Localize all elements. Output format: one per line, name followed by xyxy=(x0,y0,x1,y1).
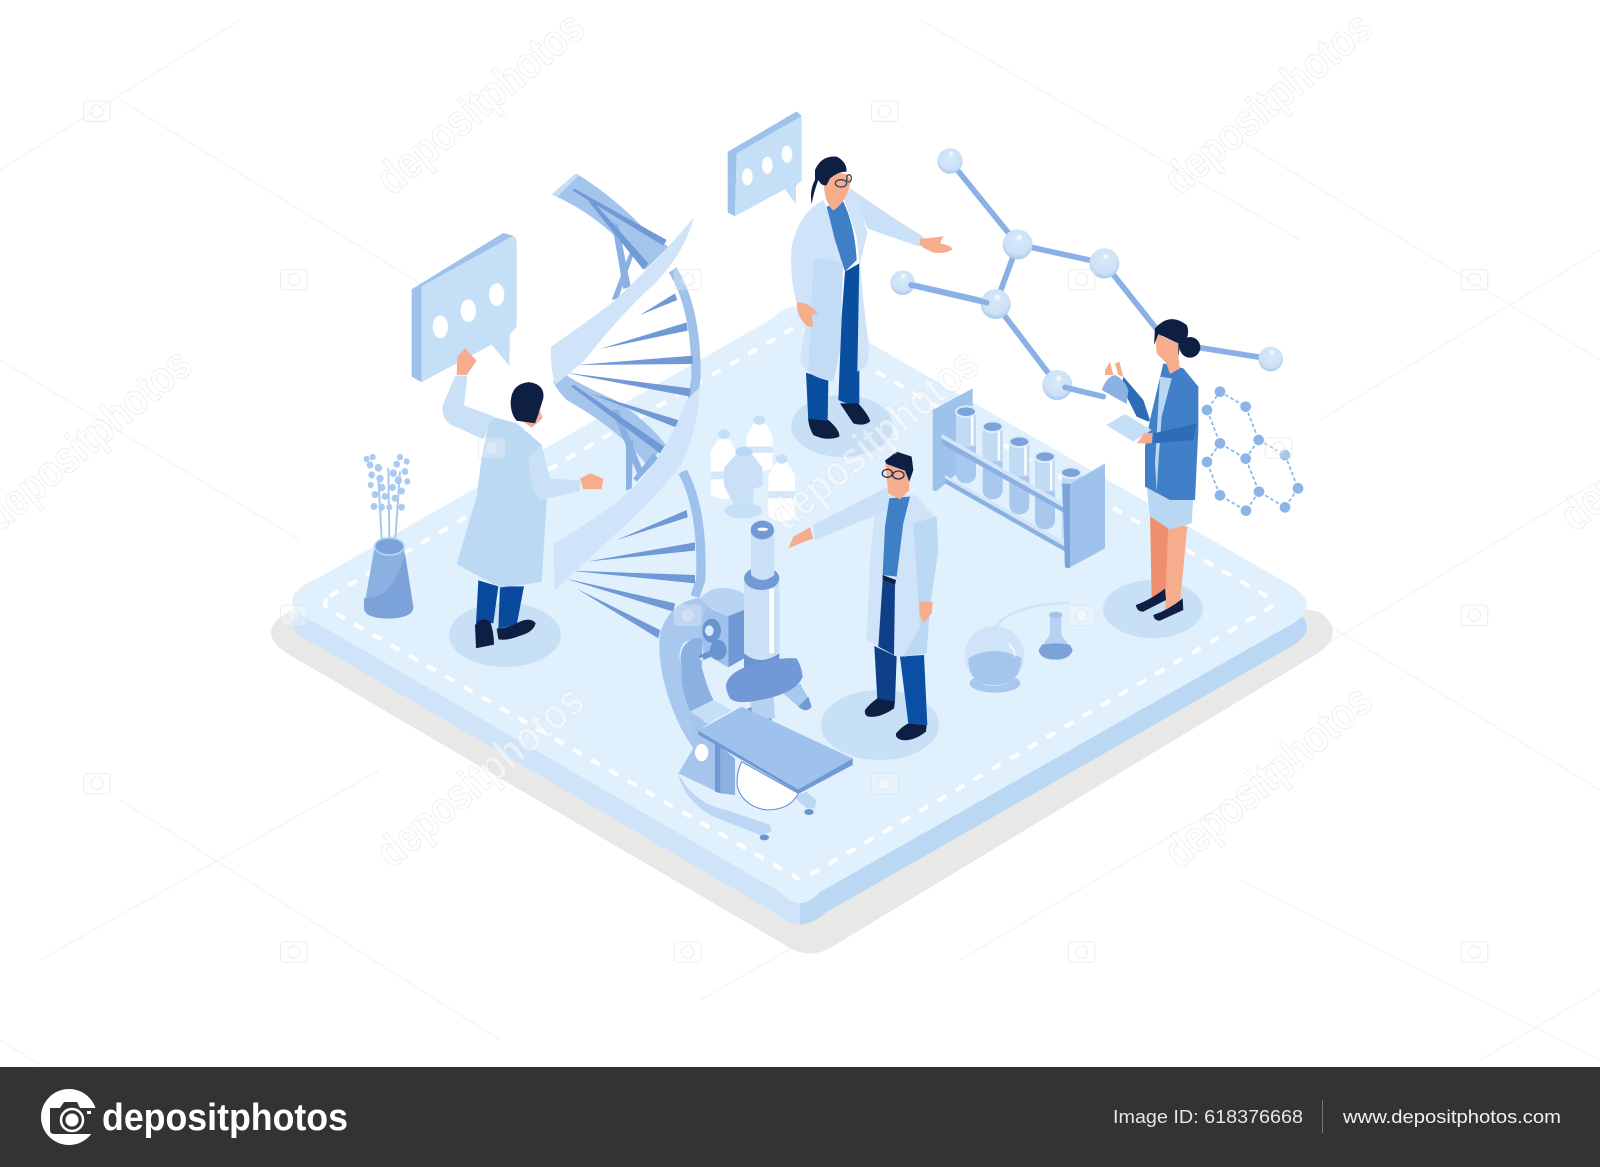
round flask apparatus xyxy=(964,603,1073,693)
DNA double helix: lower turn xyxy=(553,373,701,638)
divider xyxy=(1322,1100,1323,1133)
body tube xyxy=(744,577,779,663)
belt xyxy=(883,575,896,585)
image id: Image ID: 618376668 xyxy=(1113,1106,1303,1127)
DNA front ribbon upper xyxy=(551,217,694,385)
small conical flask xyxy=(1039,612,1073,660)
mirror xyxy=(737,762,798,810)
platform side left face xyxy=(292,328,1307,924)
shirt xyxy=(827,202,857,272)
tube highlight xyxy=(769,588,774,653)
coat panel shade xyxy=(808,259,843,382)
rack upper shelf edge xyxy=(942,438,1065,513)
rack back panel xyxy=(933,388,973,492)
rear leg xyxy=(806,373,828,422)
pointing hand xyxy=(788,527,813,548)
microscope xyxy=(659,521,853,840)
speech bubble: top xyxy=(728,111,802,216)
logo wordmark: depositphotos xyxy=(102,1097,348,1139)
stage xyxy=(698,707,853,789)
trousers xyxy=(476,580,524,629)
plant in vase xyxy=(364,454,413,619)
dark rungs xyxy=(563,189,693,397)
tubes xyxy=(956,406,1082,540)
left leg xyxy=(874,646,897,702)
watermark overlays: depositphotos xyxy=(366,674,594,877)
back ribbon upper xyxy=(552,173,668,270)
platform xyxy=(292,306,1307,924)
lowered hand xyxy=(797,302,818,327)
lab coat left xyxy=(791,200,843,382)
rack lower shelf xyxy=(945,475,1065,547)
dashed border xyxy=(325,328,1273,879)
flask tube xyxy=(995,603,1070,628)
head dark face xyxy=(728,610,744,667)
neck xyxy=(1165,357,1180,374)
back leg xyxy=(1150,513,1168,600)
lowered hand xyxy=(919,602,933,623)
shoes xyxy=(808,403,870,439)
lab coat right xyxy=(843,190,869,372)
test tube rack xyxy=(933,388,1105,568)
raised sleeve xyxy=(1122,377,1150,422)
hand on tablet xyxy=(1137,433,1153,443)
microscope arm xyxy=(659,598,717,748)
rack end panel xyxy=(1062,463,1105,568)
front bottle xyxy=(768,454,795,521)
scientist: left, seen from behind xyxy=(442,348,603,648)
foot right xyxy=(793,792,816,808)
eyepiece lens xyxy=(757,528,768,531)
speech bubble: left xyxy=(412,233,517,382)
bottles base shadow xyxy=(725,503,762,519)
stage edge xyxy=(698,731,853,793)
back strand arc xyxy=(683,472,701,597)
face xyxy=(824,173,851,211)
watermark camera icons xyxy=(84,101,1488,962)
right leg xyxy=(900,655,927,725)
extended hand xyxy=(580,473,603,489)
back bottles xyxy=(711,416,773,499)
trousers front xyxy=(878,580,895,655)
vase shade xyxy=(364,554,413,619)
scientist: top woman xyxy=(791,156,953,439)
coat shade xyxy=(903,517,938,657)
shoes xyxy=(865,698,927,740)
plant blossoms xyxy=(364,454,410,511)
hexagonal dashed molecule xyxy=(1202,386,1303,516)
extended sleeve xyxy=(528,445,580,500)
tube base band xyxy=(744,653,779,677)
watermark overlays: depositphotos xyxy=(1153,674,1382,877)
scientist: right woman xyxy=(1102,319,1200,621)
DNA double helix: upper turn xyxy=(552,173,696,405)
raised hand xyxy=(457,348,477,375)
turret xyxy=(726,658,803,702)
back strand arc xyxy=(673,270,696,405)
floor spot: top scientist xyxy=(791,395,893,457)
platform side right face xyxy=(800,616,1307,924)
tablet xyxy=(1106,414,1152,442)
arm inner shade xyxy=(681,638,713,712)
floor spot: left scientist xyxy=(449,603,561,667)
glasses xyxy=(835,175,851,187)
raised sleeve xyxy=(442,376,493,439)
lab coat xyxy=(867,495,938,657)
plant stems xyxy=(378,468,400,539)
ear and neck xyxy=(518,407,543,428)
neck and face xyxy=(885,460,909,499)
watermark overlays: depositphotos xyxy=(760,338,988,541)
platform top surface xyxy=(292,306,1307,903)
rack end strip xyxy=(1062,483,1070,568)
block dark strip xyxy=(715,740,721,793)
flask base xyxy=(970,674,1020,693)
objective lenses xyxy=(745,683,812,731)
raised fingers xyxy=(1105,362,1123,377)
glasses xyxy=(882,469,904,479)
back ribbon highlight xyxy=(552,173,579,197)
banner background xyxy=(0,1067,1600,1167)
flask glint xyxy=(1008,643,1015,657)
shoes xyxy=(1136,589,1183,621)
lamp xyxy=(695,744,708,761)
medicine bottles xyxy=(711,416,795,521)
round flask xyxy=(964,626,1024,686)
footer banner xyxy=(0,1067,1600,1167)
microscope feet xyxy=(760,809,814,840)
eyepiece tube xyxy=(751,530,774,580)
hair xyxy=(511,382,543,423)
outstretched sleeve xyxy=(848,187,923,247)
molecule model xyxy=(890,148,1283,400)
face xyxy=(1155,333,1178,363)
lab coat xyxy=(457,416,548,587)
pointing sleeve xyxy=(813,487,888,540)
floor spot: right scientist xyxy=(1103,580,1203,638)
platform shadow xyxy=(271,500,1333,954)
rack upper shelf xyxy=(942,434,1065,508)
scientist: middle man xyxy=(788,452,938,740)
skirt xyxy=(1147,487,1193,529)
foot base xyxy=(678,773,772,835)
lower sleeve xyxy=(1153,423,1197,443)
blouse xyxy=(1155,377,1172,492)
flask liquid xyxy=(968,651,1022,685)
struts xyxy=(612,410,658,491)
front leg xyxy=(838,263,859,404)
eyepiece ring xyxy=(751,521,774,539)
hair xyxy=(885,452,913,482)
block shade xyxy=(721,747,735,795)
front ribbon lower xyxy=(554,387,700,590)
head box xyxy=(702,607,728,667)
center bottle xyxy=(724,447,763,504)
rack lower shelf edge xyxy=(945,478,1065,552)
head top xyxy=(700,588,744,617)
watermark overlays xyxy=(0,1,1600,877)
back ribbon middle xyxy=(553,373,666,465)
website: www.depositphotos.com xyxy=(1342,1106,1561,1127)
hair bun xyxy=(1180,337,1200,358)
held flask xyxy=(1102,375,1128,404)
arm bridge xyxy=(690,700,732,723)
front leg xyxy=(1165,523,1187,610)
focus knobs xyxy=(700,619,727,661)
struts xyxy=(612,222,634,300)
vase body xyxy=(364,545,413,619)
vase rim xyxy=(375,538,404,555)
tube collar xyxy=(744,567,779,590)
hair xyxy=(811,156,847,204)
jacket xyxy=(1145,363,1198,500)
dark rungs xyxy=(565,385,695,638)
shirt xyxy=(883,497,910,577)
outstretched hand xyxy=(920,236,953,253)
logo icon: camera xyxy=(41,1089,97,1145)
arm block xyxy=(678,717,721,793)
hair xyxy=(1154,319,1188,357)
shoes xyxy=(475,619,536,648)
floor spot: middle scientist xyxy=(821,690,939,760)
